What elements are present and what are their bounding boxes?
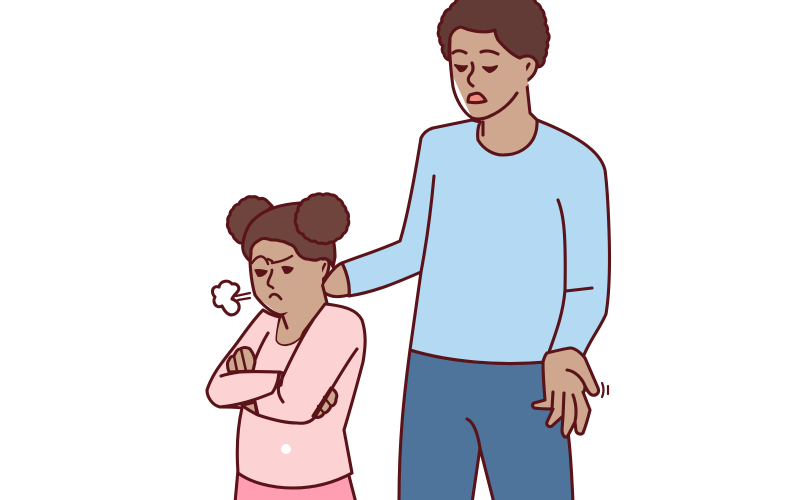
- right hand: [313, 388, 337, 417]
- man neck line: [527, 85, 537, 120]
- eyebrows: [453, 51, 498, 54]
- skin between arms: [277, 372, 283, 387]
- eyes: [255, 267, 293, 276]
- man sweater: [342, 120, 610, 364]
- man: [342, 0, 610, 500]
- girl hands: [228, 348, 337, 417]
- open mouth: [468, 93, 486, 103]
- hand on hip: [532, 348, 599, 437]
- ear: [515, 54, 537, 82]
- collar crease: [283, 317, 287, 328]
- eyes: [455, 65, 497, 72]
- face: [448, 20, 528, 118]
- puff of angry breath: [212, 281, 239, 315]
- girl neck fill: [275, 280, 327, 343]
- angry brows: [252, 256, 292, 264]
- girl right hair bun: [295, 194, 349, 244]
- hand motion marks: [602, 383, 608, 397]
- collar crease: [481, 122, 485, 135]
- girl ear: [317, 259, 329, 281]
- nose and frown: [268, 270, 281, 299]
- folded arm lines: [220, 320, 357, 423]
- collar skin: [277, 283, 322, 344]
- girl left hair bun: [227, 197, 272, 243]
- girl neck line: [322, 283, 327, 303]
- trouser crease: [467, 419, 480, 448]
- man neck fill: [478, 80, 537, 155]
- girl hair: [243, 203, 335, 267]
- girl skirt: [235, 470, 356, 500]
- man hand on girl's neck: [322, 263, 349, 297]
- nose: [468, 63, 473, 86]
- sweater fold lines: [421, 176, 592, 352]
- girl sweater: [207, 304, 365, 488]
- belly highlight: [281, 444, 291, 454]
- girl: [207, 194, 365, 500]
- left hand: [228, 348, 255, 372]
- hair: [438, 0, 549, 67]
- man head: [438, 0, 549, 119]
- inner hand skin under elbow: [242, 402, 258, 415]
- hand finger lines: [552, 370, 585, 422]
- girl face: [247, 225, 322, 315]
- man trousers: [399, 350, 573, 500]
- breath lines: [236, 293, 250, 300]
